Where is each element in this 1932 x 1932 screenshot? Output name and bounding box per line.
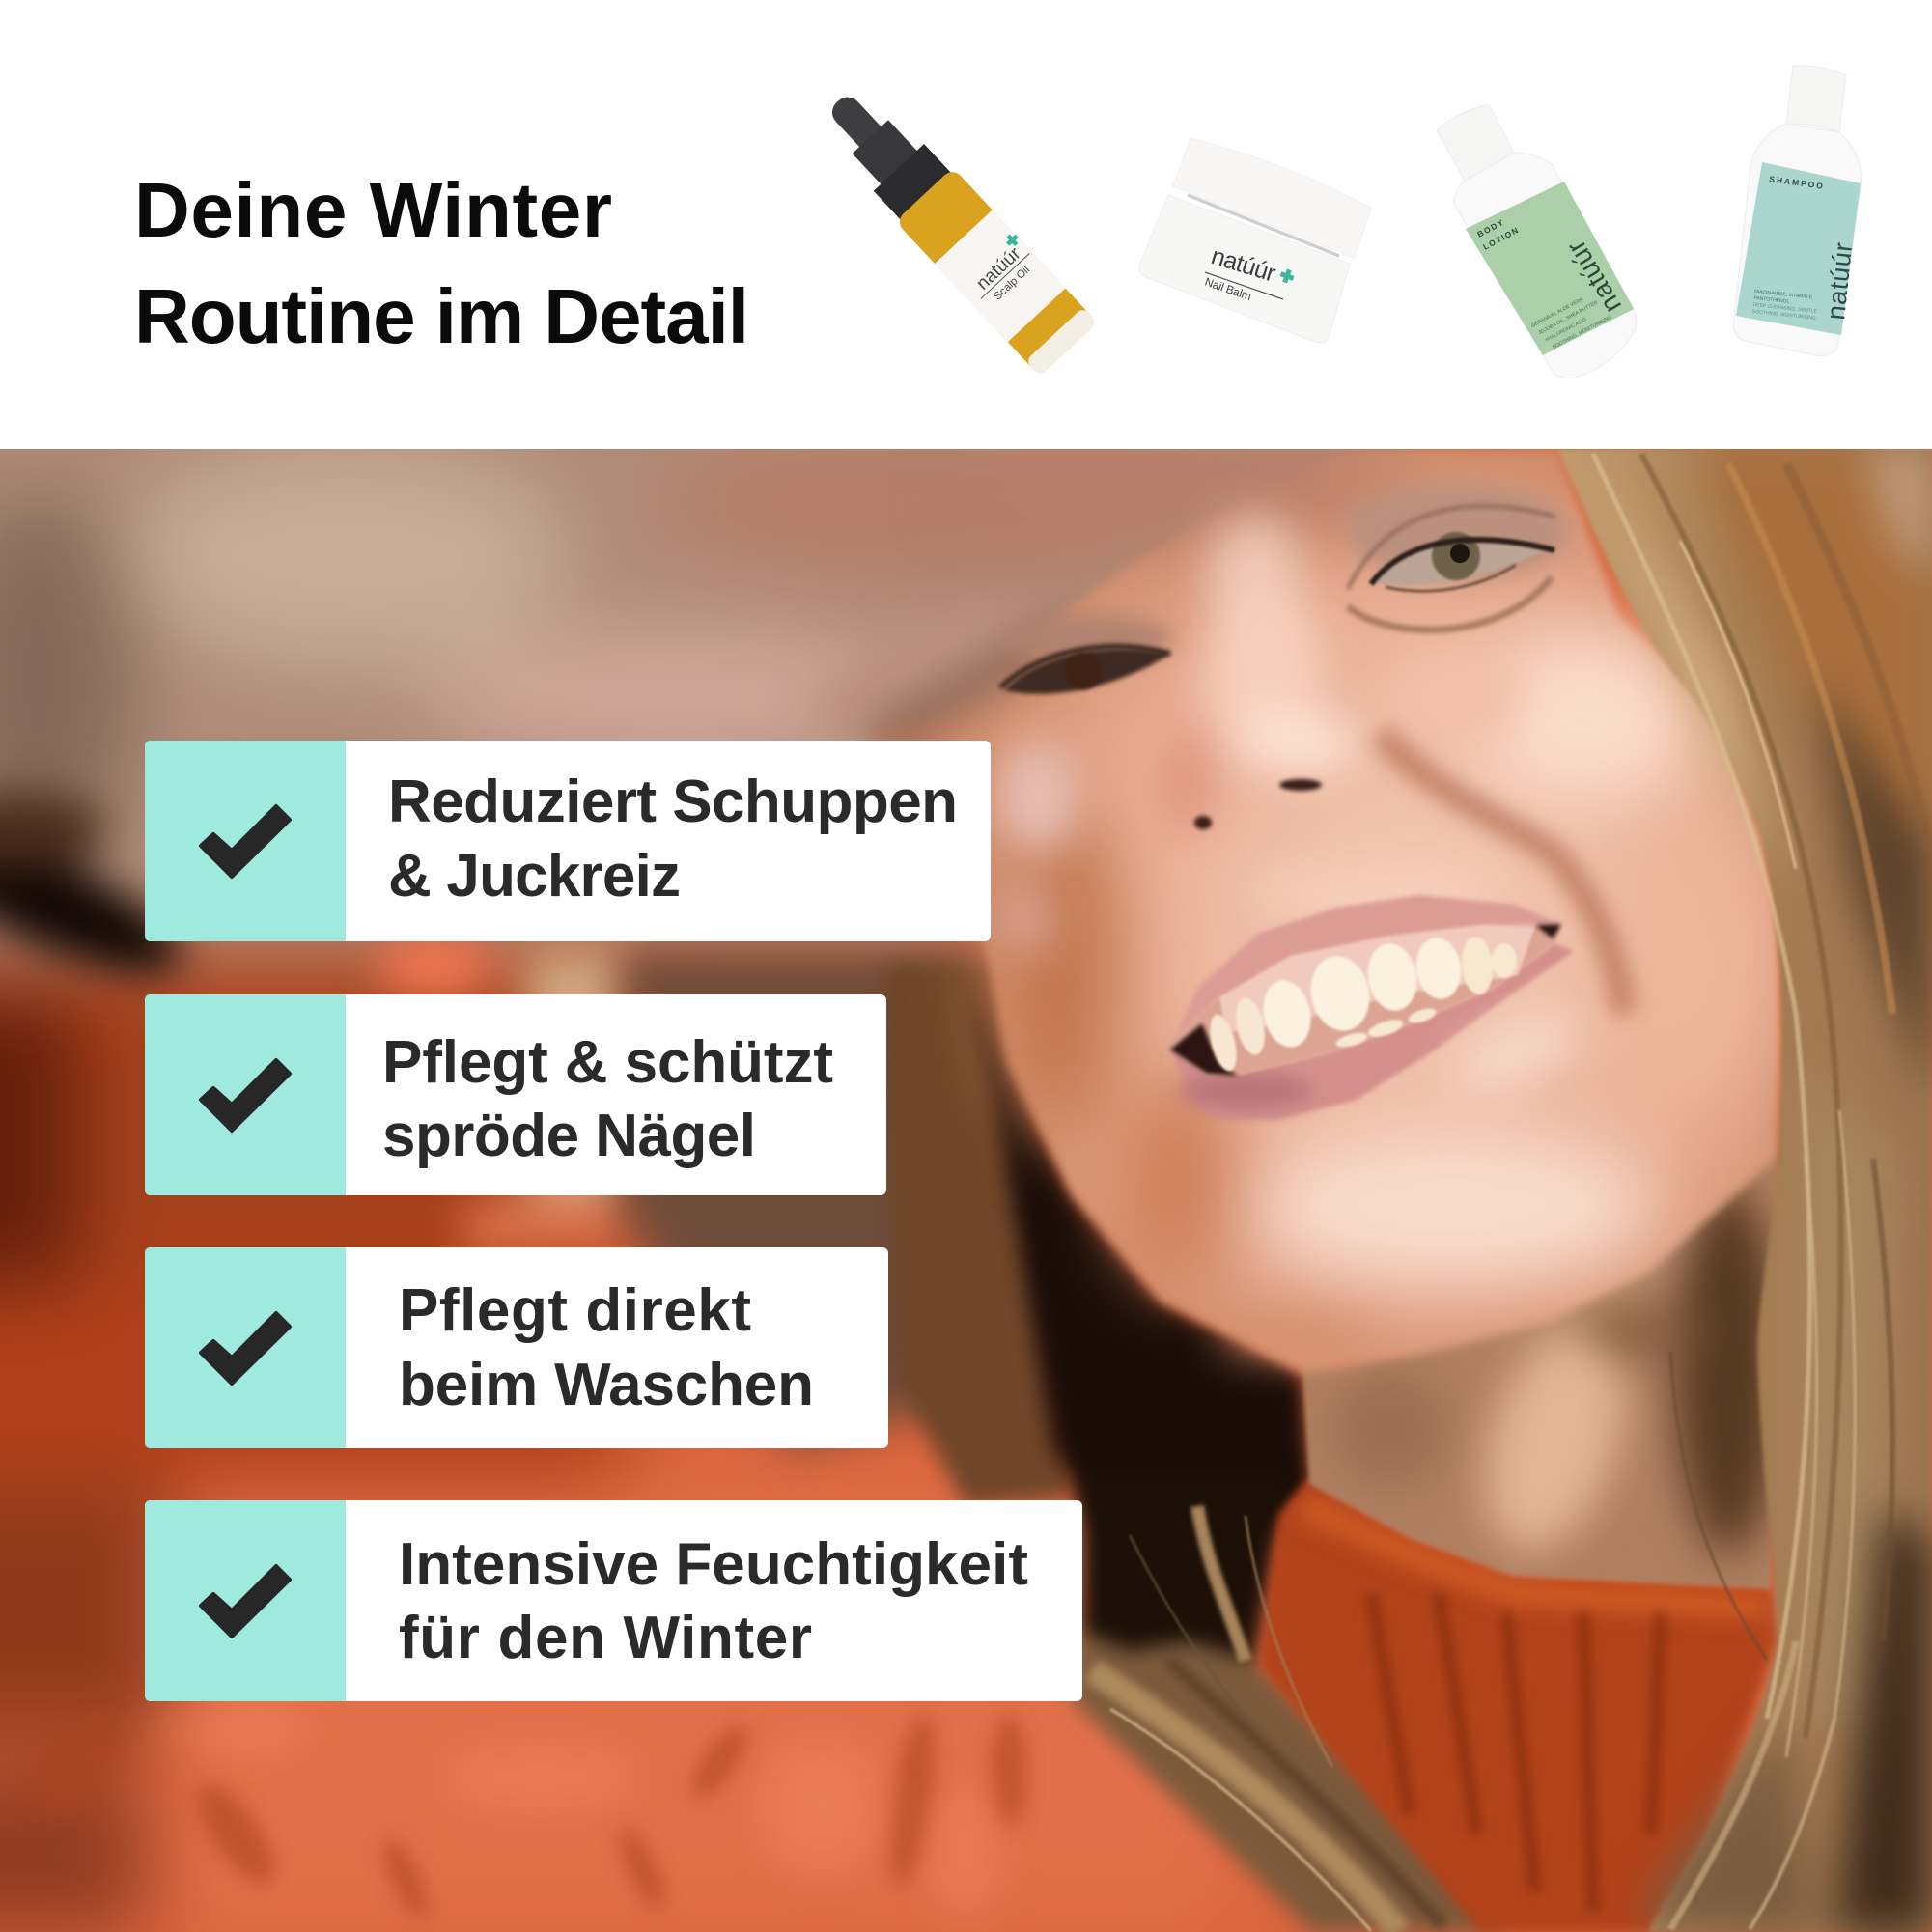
icon: check mark xyxy=(201,1313,290,1384)
right hair mass xyxy=(1557,449,1932,1932)
gum xyxy=(1219,925,1535,1033)
benefit card 4: Intensive Feuchtigkeit xyxy=(399,1531,1028,1598)
icon: check mark xyxy=(201,806,290,877)
product: shampoo bottle: DEEP CLEANSING, GENTLE xyxy=(1752,302,1818,315)
product: scalp oil dropper bottle: Scalp Oil xyxy=(992,265,1032,303)
sweater collar ribs xyxy=(1371,1593,1661,1912)
blurred hand and brow shadow over face edge xyxy=(791,574,1080,956)
neck shading xyxy=(1332,1188,1781,1568)
sweater collar xyxy=(1260,1477,1778,1932)
product: scalp oil dropper bottle xyxy=(808,74,1098,377)
product: shampoo bottle: SOOTHING, MOISTURISING xyxy=(1752,309,1816,322)
mouth interior xyxy=(1170,925,1561,1077)
hair strands xyxy=(1593,454,1929,1929)
lower hair strands xyxy=(1091,1506,1443,1932)
lower teeth xyxy=(1334,1006,1438,1050)
benefit card 1 xyxy=(145,741,991,941)
product: nail balm jar xyxy=(1139,138,1371,343)
title: Routine im Detail xyxy=(134,273,749,359)
blurred hair behind shoulder xyxy=(623,951,1062,1448)
neck xyxy=(1302,1149,1778,1589)
sweater collar roll highlight xyxy=(1303,1506,1767,1607)
hair colour variation xyxy=(1583,449,1932,1932)
product: body lotion bottle: HYALURONIC ACID xyxy=(1545,317,1588,344)
benefit card 1: & Juckreiz xyxy=(388,843,681,910)
upper teeth xyxy=(1205,935,1517,1074)
icon: check mark xyxy=(201,1060,290,1131)
benefit card 4 xyxy=(145,1500,1082,1701)
title: Deine Winter xyxy=(134,167,612,253)
benefit card 3: Pflegt direkt xyxy=(399,1277,751,1344)
benefit card 2: Pflegt & schützt xyxy=(382,1029,833,1096)
brown hair stripe left of the jaw xyxy=(883,966,1072,1506)
title xyxy=(134,167,749,359)
product: body lotion bottle: BODY xyxy=(1475,217,1506,239)
product: shampoo bottle: NIACINAMIDE, VITAMIN E xyxy=(1754,289,1813,300)
product: body lotion bottle: LOTION xyxy=(1481,225,1521,252)
right eye xyxy=(1347,483,1569,630)
icon: check mark xyxy=(201,1566,290,1637)
white header background xyxy=(0,0,1932,449)
nostrils xyxy=(1194,779,1322,829)
benefit card 2 xyxy=(145,994,886,1195)
left eye xyxy=(999,614,1173,694)
dark shadow under arm xyxy=(0,792,198,1000)
product: scalp oil dropper bottle: natúúr xyxy=(972,243,1025,294)
blurred bright sweater patch and tan patch xyxy=(377,935,628,1255)
dark hair behind the neck xyxy=(970,985,1313,1535)
product: body lotion bottle: GERANIUM, ALOE VERA xyxy=(1530,296,1584,329)
facial highlights xyxy=(1159,517,1521,1355)
product: shampoo bottle: SHAMPOO xyxy=(1769,174,1825,191)
face shape xyxy=(862,449,1780,1373)
benefit card 3: beim Waschen xyxy=(399,1352,814,1418)
sweater creases lower left xyxy=(98,1711,1033,1919)
product: shampoo bottle: PANTOTHENOL xyxy=(1753,295,1790,305)
product: shampoo bottle: natúúr xyxy=(1821,241,1858,322)
product: body lotion bottle xyxy=(1437,104,1636,378)
lower hair band xyxy=(1072,1477,1511,1932)
lower lip xyxy=(1170,943,1574,1120)
sweater braid highlights xyxy=(158,1705,985,1900)
product: nail balm jar: Nail Balm xyxy=(1203,275,1253,303)
smile fold xyxy=(1381,734,1624,1014)
upper lip xyxy=(1170,895,1561,1050)
lower lip shadow xyxy=(1178,1072,1313,1110)
face shading xyxy=(966,425,1743,1284)
benefit card 3 xyxy=(145,1247,888,1448)
blurred background: arm and sweater xyxy=(0,449,1423,1932)
product: nail balm jar: natúúr xyxy=(1208,242,1278,288)
product: shampoo bottle xyxy=(1733,66,1862,355)
benefit card 4: für den Winter xyxy=(399,1605,812,1671)
benefit card 2: spröde Nägel xyxy=(382,1103,756,1169)
chin highlight under lip xyxy=(1443,999,1588,1106)
product: body lotion bottle: SOOTHING, MOISTURISING xyxy=(1552,315,1613,350)
mouth corners xyxy=(1170,924,1561,1076)
photo base colour xyxy=(0,449,1932,1932)
product: body lotion bottle: natúúr xyxy=(1560,236,1627,319)
benefit card 1: Reduziert Schuppen xyxy=(388,769,958,835)
product: body lotion bottle: JOJOBA OIL, SHEA BUTTER xyxy=(1537,300,1599,336)
